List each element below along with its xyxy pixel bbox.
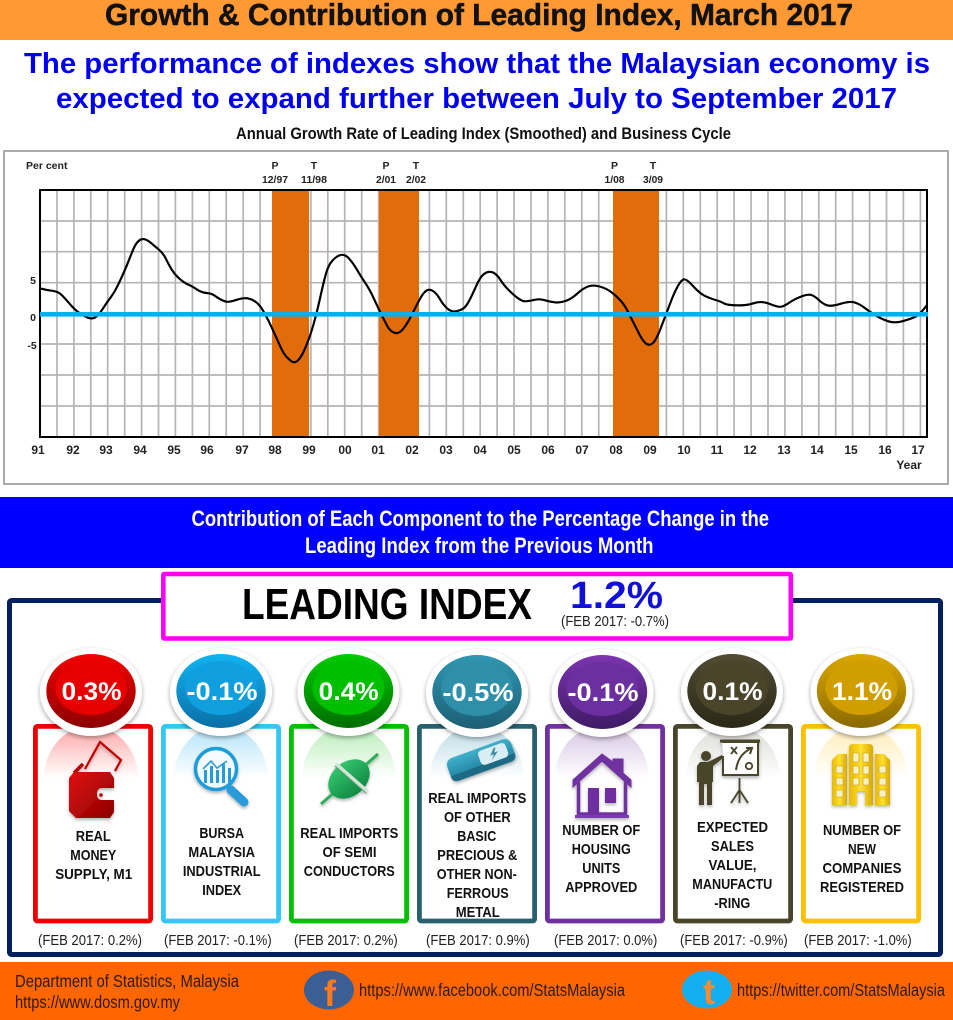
card label: -RING bbox=[714, 895, 750, 912]
icon: facebook: f bbox=[324, 973, 337, 1014]
card label: METAL bbox=[456, 904, 500, 921]
x axis year labels: 06 bbox=[541, 443, 555, 457]
leading index value: 1.2% bbox=[570, 575, 663, 617]
section heading band bbox=[0, 497, 953, 568]
x axis year labels: 99 bbox=[302, 443, 316, 457]
card label bbox=[300, 825, 398, 880]
card label: REGISTERED bbox=[820, 879, 904, 896]
card label: NUMBER OF bbox=[562, 822, 640, 839]
card label bbox=[428, 790, 526, 921]
card label: OTHER NON- bbox=[437, 866, 517, 883]
department name and website bbox=[15, 971, 239, 1012]
card label bbox=[183, 825, 261, 899]
peak and trough labels: T bbox=[650, 160, 657, 172]
x axis year labels: 13 bbox=[777, 443, 791, 457]
card label: SUPPLY, M1 bbox=[55, 866, 132, 883]
card label: VALUE, bbox=[708, 857, 756, 874]
headline statement bbox=[24, 48, 930, 115]
peak and trough labels: P bbox=[271, 160, 279, 172]
previous month values: (FEB 2017: 0.0%) bbox=[554, 932, 657, 949]
card label: OF OTHER bbox=[444, 809, 511, 826]
icon: presenter at board bbox=[697, 741, 760, 805]
badge: 0.4% bbox=[298, 648, 400, 736]
card label: PRECIOUS & bbox=[437, 847, 517, 864]
card label: REAL bbox=[76, 828, 111, 845]
component card: real money supply bbox=[35, 648, 151, 921]
x axis year labels: 14 bbox=[810, 443, 824, 457]
x axis year labels: 11 bbox=[711, 443, 724, 457]
card label bbox=[692, 819, 772, 912]
x axis year labels: 04 bbox=[473, 443, 487, 457]
x axis year labels: 93 bbox=[99, 443, 113, 457]
card label: OF SEMI bbox=[322, 844, 376, 861]
badge: -0.5%: -0.5% bbox=[442, 679, 514, 707]
card label: BASIC bbox=[457, 828, 496, 845]
card label: MANUFACTU bbox=[692, 876, 772, 893]
y axis labels: -5 bbox=[27, 340, 37, 352]
card label: CONDUCTORS bbox=[304, 863, 395, 880]
badge: -0.1%: -0.1% bbox=[568, 679, 638, 707]
x axis year labels: Year bbox=[896, 458, 922, 472]
card label bbox=[562, 822, 640, 896]
x axis year labels: 15 bbox=[844, 443, 858, 457]
recession band: 12/97 to 11/98 bbox=[272, 190, 309, 438]
leading index label: LEADING INDEX bbox=[242, 580, 532, 629]
card label: REAL IMPORTS bbox=[300, 825, 398, 842]
peak and trough labels: 3/09 bbox=[643, 174, 663, 186]
footer bbox=[0, 962, 953, 1020]
previous month values: (FEB 2017: -0.9%) bbox=[680, 932, 788, 949]
y axis labels bbox=[26, 160, 68, 352]
card label: INDUSTRIAL bbox=[183, 863, 261, 880]
department name and website: https://www.dosm.gov.my bbox=[15, 992, 180, 1012]
badge: 0.1% bbox=[681, 648, 783, 736]
zero baseline bbox=[40, 312, 928, 317]
x axis year labels: 96 bbox=[200, 443, 214, 457]
icon: twitter: t bbox=[703, 971, 715, 1012]
badge: 1.1%: 1.1% bbox=[832, 678, 892, 706]
card label: COMPANIES bbox=[822, 860, 902, 877]
x axis year labels: 12 bbox=[743, 443, 757, 457]
leading index previous month: (FEB 2017: -0.7%) bbox=[561, 613, 669, 630]
x axis year labels: 08 bbox=[609, 443, 623, 457]
x axis year labels: 16 bbox=[878, 443, 892, 457]
card label: APPROVED bbox=[565, 879, 637, 896]
component card: other metals bbox=[419, 649, 535, 921]
x axis year labels: 97 bbox=[235, 443, 249, 457]
icon: battery bbox=[445, 737, 517, 783]
card label: MONEY bbox=[70, 847, 116, 864]
badge: 0.3%: 0.3% bbox=[62, 678, 122, 706]
component card: semiconductors bbox=[291, 648, 407, 921]
x axis year labels: 91 bbox=[31, 443, 45, 457]
peak and trough labels: P bbox=[382, 160, 390, 172]
icon: twitter bbox=[682, 970, 732, 1012]
card label: REAL IMPORTS bbox=[428, 790, 526, 807]
card label: NUMBER OF bbox=[823, 822, 901, 839]
headline statement: expected to expand further between July to September 2017 bbox=[56, 83, 897, 115]
card label bbox=[55, 828, 132, 883]
x axis year labels: 10 bbox=[677, 443, 691, 457]
badge: -0.5% bbox=[426, 649, 528, 737]
x axis year labels: 94 bbox=[133, 443, 147, 457]
card label bbox=[820, 822, 904, 896]
previous month values bbox=[38, 932, 912, 949]
card label: INDEX bbox=[202, 882, 241, 899]
peak and trough labels: 12/97 bbox=[262, 174, 288, 186]
previous month values: (FEB 2017: -1.0%) bbox=[804, 932, 912, 949]
card label: SALES bbox=[711, 838, 754, 855]
recession band: 1/08 to 3/09 bbox=[613, 190, 659, 438]
x axis year labels: 00 bbox=[338, 443, 352, 457]
card label: UNITS bbox=[582, 860, 620, 877]
x axis year labels: 09 bbox=[643, 443, 657, 457]
card label: FERROUS bbox=[447, 885, 509, 902]
badge: -0.1% bbox=[170, 648, 272, 736]
x axis year labels: 07 bbox=[575, 443, 589, 457]
peak and trough labels: T bbox=[413, 160, 420, 172]
card label: MALAYSIA bbox=[188, 844, 255, 861]
facebook link: https://www.facebook.com/StatsMalaysia bbox=[359, 980, 625, 1000]
card label: BURSA bbox=[199, 825, 244, 842]
title banner bbox=[0, 0, 953, 40]
section heading band: Contribution of Each Component to the Percentage Change in the bbox=[192, 506, 769, 531]
previous month values: (FEB 2017: -0.1%) bbox=[164, 932, 272, 949]
section heading band: Leading Index from the Previous Month bbox=[305, 533, 654, 558]
badge: 0.4%: 0.4% bbox=[319, 678, 379, 706]
previous month values: (FEB 2017: 0.9%) bbox=[426, 932, 530, 949]
peak and trough labels: 2/02 bbox=[406, 174, 426, 186]
component card: new companies bbox=[803, 648, 919, 921]
x axis year labels: 02 bbox=[405, 443, 419, 457]
headline statement: The performance of indexes show that the Malaysian economy is bbox=[24, 48, 930, 80]
x axis year labels: 98 bbox=[268, 443, 282, 457]
icon: facebook bbox=[304, 970, 354, 1014]
icon: magnifier over chart bbox=[196, 748, 244, 802]
peak and trough labels: T bbox=[311, 160, 318, 172]
x axis year labels: 03 bbox=[439, 443, 453, 457]
y axis labels: 0 bbox=[30, 312, 36, 324]
x axis year labels: 95 bbox=[167, 443, 181, 457]
badge: 1.1% bbox=[810, 648, 912, 736]
department name and website: Department of Statistics, Malaysia bbox=[15, 971, 239, 991]
card label: NEW bbox=[848, 841, 877, 858]
x axis year labels: 01 bbox=[371, 443, 385, 457]
card label: HOUSING bbox=[572, 841, 631, 858]
badge: -0.1%: -0.1% bbox=[186, 678, 258, 706]
x axis year labels: 92 bbox=[66, 443, 80, 457]
icon: capacitor bbox=[320, 751, 378, 807]
x axis year labels bbox=[31, 443, 925, 472]
y axis labels: 5 bbox=[30, 275, 36, 287]
peak and trough labels: 1/08 bbox=[604, 174, 625, 186]
icon: wallet bbox=[69, 742, 121, 818]
badge: 0.3% bbox=[40, 648, 142, 736]
line chart panel bbox=[4, 151, 948, 484]
recession band: 2/01 to 2/02 bbox=[379, 190, 419, 438]
component card: housing units bbox=[547, 649, 663, 921]
peak and trough labels: 11/98 bbox=[301, 174, 327, 186]
icon: office buildings bbox=[832, 744, 890, 805]
card label: EXPECTED bbox=[697, 819, 768, 836]
leading index growth curve bbox=[40, 239, 927, 362]
x axis year labels: 17 bbox=[911, 443, 925, 457]
peak and trough labels: P bbox=[611, 160, 618, 172]
leading index box bbox=[163, 574, 791, 638]
icon: house bbox=[573, 754, 631, 818]
component card: expected sales bbox=[675, 648, 791, 921]
chart title: Annual Growth Rate of Leading Index (Smoothed) and Business Cycle bbox=[236, 124, 731, 143]
peak and trough labels bbox=[262, 160, 663, 186]
badge: -0.1% bbox=[552, 649, 654, 737]
previous month values: (FEB 2017: 0.2%) bbox=[38, 932, 142, 949]
peak and trough labels: 2/01 bbox=[376, 174, 396, 186]
previous month values: (FEB 2017: 0.2%) bbox=[294, 932, 398, 949]
y axis labels: Per cent bbox=[26, 160, 68, 172]
components frame bbox=[10, 600, 940, 954]
x axis year labels: 05 bbox=[507, 443, 521, 457]
component card: bursa malaysia bbox=[163, 648, 279, 921]
badge: 0.1%: 0.1% bbox=[702, 678, 762, 706]
plot border bbox=[40, 190, 927, 437]
